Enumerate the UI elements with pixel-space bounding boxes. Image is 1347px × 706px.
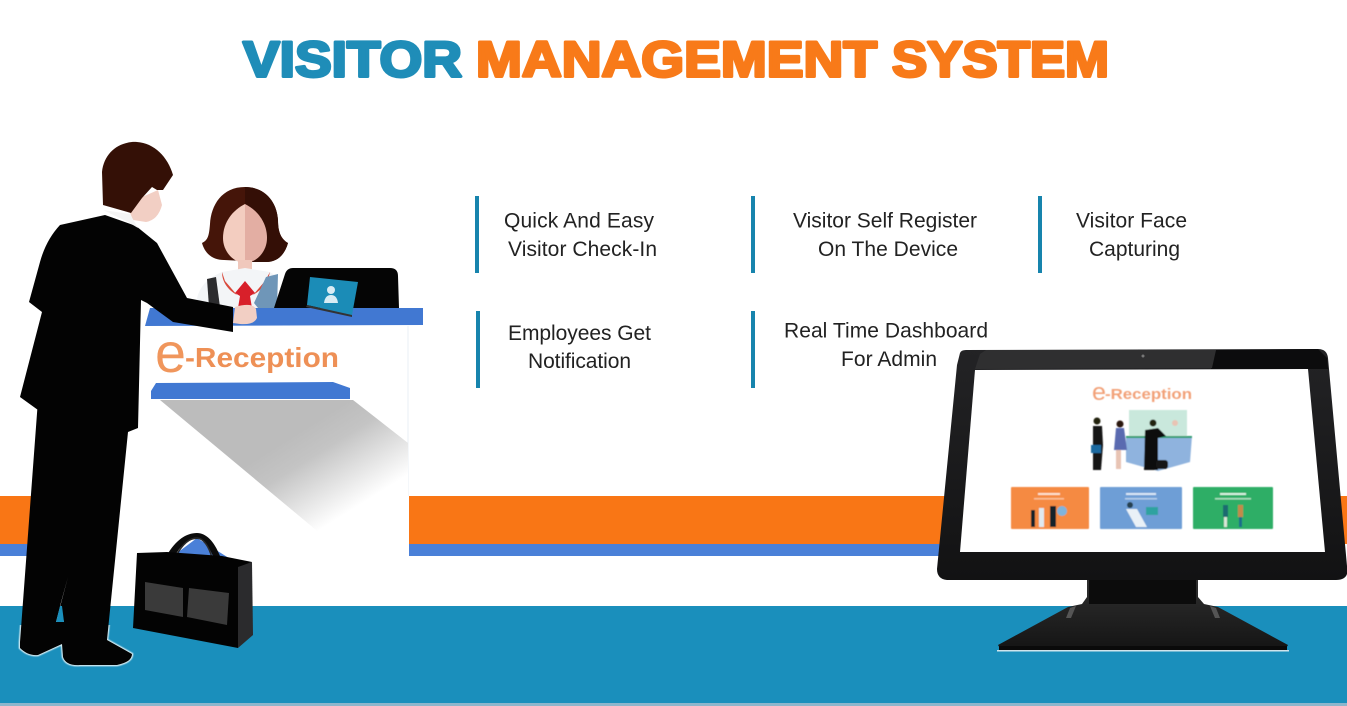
screen logo	[1092, 379, 1192, 406]
monitor stand	[997, 578, 1289, 652]
orange and blue background band	[0, 496, 1347, 556]
receptionist	[196, 187, 288, 308]
screen logo: e	[1092, 379, 1106, 406]
briefcase	[133, 533, 253, 648]
feature: face capturing	[1038, 196, 1187, 273]
man at the desk	[20, 142, 257, 665]
reception desk	[145, 308, 423, 556]
feature: self register: On The Device	[818, 238, 958, 261]
title: SYSTEM	[892, 32, 1109, 88]
screen logo: -Reception	[1105, 386, 1192, 403]
feature: self register: Visitor Self Register	[793, 210, 977, 232]
feature list	[475, 196, 1187, 388]
desk logo: -Reception	[185, 342, 339, 373]
feature: face capturing: Capturing	[1089, 238, 1180, 261]
screen card: green	[1193, 487, 1273, 529]
skin	[128, 190, 162, 222]
icon: tablet with user	[306, 277, 358, 317]
kiosk monitor	[937, 349, 1347, 652]
feature: admin dashboard: For Admin	[841, 348, 937, 371]
feature: admin dashboard	[751, 311, 988, 388]
desk shadow	[160, 400, 408, 535]
screen card: orange	[1011, 487, 1089, 529]
feature: self register	[751, 196, 977, 273]
feature: employee notification: Notification	[528, 350, 631, 373]
teal floor	[0, 606, 1347, 706]
screen card: blue	[1100, 487, 1182, 529]
feature: quick check-in	[475, 196, 657, 273]
title: VISITOR	[243, 32, 462, 88]
feature: admin dashboard: Real Time Dashboard	[784, 320, 988, 342]
hair	[102, 142, 173, 213]
title: MANAGEMENT	[476, 32, 877, 88]
desk logo: e	[155, 321, 186, 384]
feature: quick check-in: Quick And Easy	[504, 210, 654, 232]
feature: employee notification: Employees Get	[508, 322, 651, 345]
desk logo	[155, 321, 339, 384]
monitor bezel	[937, 349, 1347, 580]
feature: quick check-in: Visitor Check-In	[508, 238, 657, 261]
feature: face capturing: Visitor Face	[1076, 210, 1187, 232]
feature: employee notification	[476, 311, 651, 388]
desk laptop	[274, 268, 399, 317]
screen illustration: visitors at reception	[1091, 410, 1192, 471]
monitor screen	[960, 369, 1325, 552]
title	[243, 32, 1109, 88]
